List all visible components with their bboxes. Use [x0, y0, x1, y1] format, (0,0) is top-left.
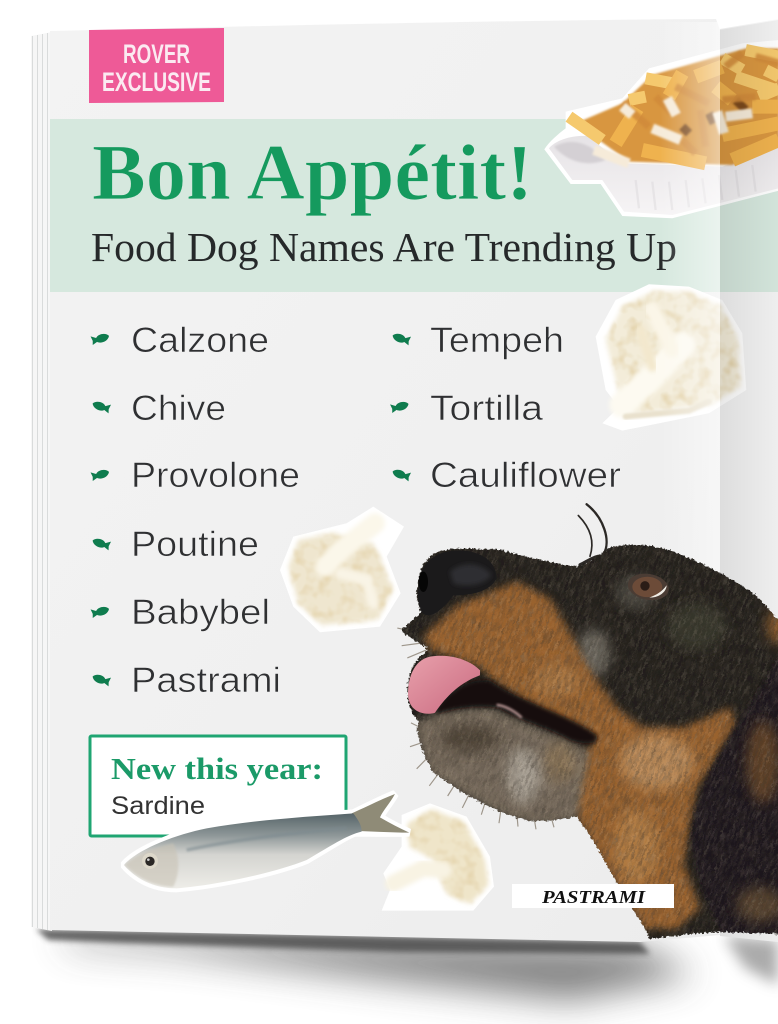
photo: dog licking its nose	[397, 503, 778, 940]
item: Cauliflower: Cauliflower	[430, 456, 621, 495]
pale fries	[569, 50, 778, 140]
callout: new this year: Sardine	[111, 792, 205, 820]
callout: new this year	[90, 736, 346, 836]
florets	[407, 809, 488, 904]
sticker outline	[596, 284, 746, 431]
nose	[418, 550, 497, 615]
item: Chive: Chive	[131, 389, 226, 428]
grey cheek patches	[577, 575, 727, 677]
caption: Pastrami: PASTRAMI	[541, 887, 646, 907]
item: Pastrami: Pastrami	[131, 661, 281, 700]
photo: sardine	[124, 794, 409, 888]
florets	[288, 533, 393, 625]
item: Chive	[91, 389, 226, 428]
sticker outline	[280, 507, 404, 632]
dog fur colour regions	[402, 544, 778, 940]
sticker outline	[382, 803, 494, 911]
grey beard	[413, 708, 590, 825]
head	[125, 843, 178, 887]
dark base coat	[390, 524, 778, 946]
dish ribbing	[636, 165, 756, 210]
stems	[622, 345, 682, 405]
ear and neck shadow	[691, 653, 778, 935]
dish inner shade	[554, 142, 606, 163]
item: Tortilla	[390, 389, 544, 428]
page fold shading	[660, 19, 778, 942]
tan snout and neck	[423, 582, 735, 929]
body	[124, 813, 362, 888]
photo: poutine in a white dish	[544, 40, 778, 218]
tan highlights	[533, 663, 693, 884]
stacked page edges	[31, 32, 52, 931]
callout: new this year: New this year:	[111, 751, 323, 786]
drop shadow under the magazine	[36, 929, 778, 1000]
right page	[720, 20, 778, 942]
ear brown patches	[737, 609, 778, 922]
pile shadow gaps	[682, 100, 746, 133]
dish	[549, 136, 778, 215]
caption: Pastrami	[512, 884, 674, 908]
tongue	[408, 656, 480, 714]
tail	[352, 794, 409, 833]
sticker outline	[124, 794, 409, 888]
photo: cauliflower by the sardine	[382, 803, 494, 911]
dish sticker outline	[544, 40, 778, 218]
badge: Rover Exclusive	[89, 28, 224, 103]
left page	[50, 19, 720, 942]
fur streaks	[402, 544, 778, 939]
golden fries	[616, 67, 778, 163]
item: Provolone: Provolone	[131, 456, 300, 495]
eye	[142, 853, 158, 869]
title: Bon Appétit!	[92, 130, 533, 217]
stem	[393, 868, 443, 883]
subtitle: Food Dog Names Are Trending Up	[91, 224, 677, 270]
lower lip	[497, 705, 522, 718]
frayed beard hairs	[397, 628, 554, 829]
photo: cauliflower top right	[596, 284, 746, 431]
item: Tempeh: Tempeh	[430, 321, 564, 360]
item: Tortilla: Tortilla	[430, 389, 544, 428]
item: Calzone: Calzone	[131, 321, 269, 360]
body stripe	[187, 828, 347, 850]
pale beard highlights	[440, 725, 577, 803]
eye	[626, 571, 671, 603]
badge: Rover Exclusive: EXCLUSIVE	[102, 67, 211, 97]
stem	[325, 523, 375, 567]
gravy	[622, 53, 778, 153]
badge: Rover Exclusive: ROVER	[123, 39, 190, 69]
cheese curds	[594, 98, 752, 163]
mint header band	[50, 119, 778, 292]
light fur streaks	[402, 544, 778, 940]
photo: cauliflower next to list	[280, 507, 404, 632]
name list	[91, 321, 621, 700]
mouth line	[437, 680, 597, 743]
forehead whisker hairs	[578, 504, 607, 565]
gravy base	[576, 48, 778, 165]
item: Babybel: Babybel	[131, 593, 270, 632]
florets	[606, 292, 741, 413]
item: Poutine: Poutine	[131, 525, 259, 564]
